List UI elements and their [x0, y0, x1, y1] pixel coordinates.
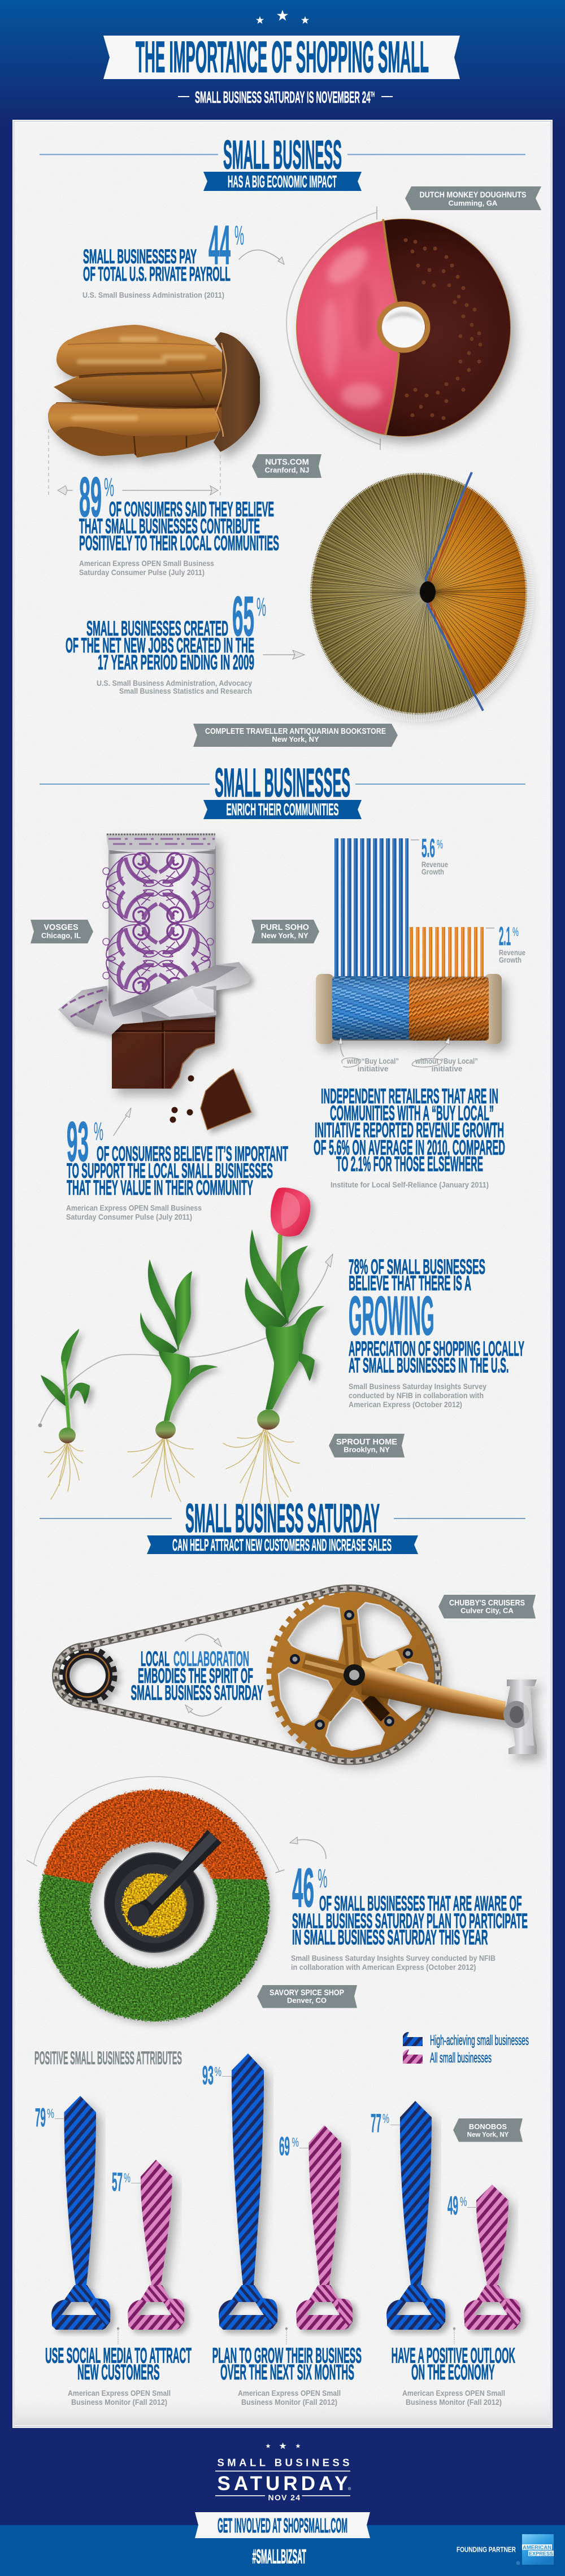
icon: american express logo: AMERICAN	[523, 2544, 551, 2551]
text: EMBODIES THE SPIRIT OF	[138, 1664, 253, 1687]
text: 89 percent	[79, 465, 279, 577]
ring window rims	[279, 1603, 428, 1750]
tag: nuts.com: NUTS.COM	[265, 458, 309, 467]
text: local collaboration	[131, 1634, 263, 1716]
text: OF THE NET NEW JOBS CREATED IN THE	[66, 634, 254, 657]
tag: bonobos	[453, 2118, 523, 2142]
text: 93 percent: Saturday Consumer Pulse (July 2011)	[66, 1213, 192, 1221]
tag: bonobos: BONOBOS	[469, 2122, 507, 2131]
illustration: fanned book pie chart	[310, 472, 537, 725]
label: 5.6 percent revenue growth: Growth	[421, 868, 444, 876]
tie bar: 79 percent	[51, 2096, 110, 2330]
illustration: chocolate bar	[58, 833, 251, 1130]
middle lobe	[54, 370, 222, 408]
label: 2.1 percent revenue growth: Growth	[499, 956, 521, 964]
caption: social media: USE SOCIAL MEDIA TO ATTRACT	[45, 2344, 192, 2368]
text: OF TOTAL U.S. PRIVATE PAYROLL	[83, 263, 231, 285]
text: 46 percent	[290, 1837, 528, 1972]
text: 65 percent: SMALL BUSINESSES CREATED	[86, 617, 228, 640]
text: growing appreciation: American Express (October 2012)	[349, 1400, 462, 1409]
chain	[56, 1588, 438, 1761]
arrow: to doughnut	[239, 250, 284, 264]
tag: sprout home	[329, 1434, 405, 1457]
tag: dutch monkey doughnuts	[405, 186, 541, 210]
back bottom lobe	[48, 402, 221, 458]
text: 46 percent: %	[318, 1863, 328, 1893]
text: 65 percent	[66, 585, 266, 695]
icon: stars	[256, 10, 309, 24]
tag: purl soho: PURL SOHO	[260, 923, 309, 932]
tag: vosges: VOSGES	[44, 923, 79, 932]
subtitle	[178, 89, 393, 107]
label: 5.6 percent revenue growth: 5.6	[421, 833, 435, 863]
tag: sprout home: SPROUT HOME	[336, 1438, 397, 1447]
text: growing appreciation	[349, 1255, 524, 1409]
tag: savory spice shop: Denver, CO	[287, 1996, 327, 2004]
tag: purl soho	[251, 920, 319, 943]
founding partner	[457, 2534, 554, 2565]
legend item: high-achieving	[403, 2032, 529, 2048]
front bottom lobe	[48, 403, 220, 436]
text: 44 percent payroll: SMALL BUSINESSES PAY	[83, 246, 197, 268]
value: 57 percent: %	[124, 2170, 131, 2185]
tag: complete traveller antiquarian bookstore: COMPLETE TRAVELLER ANTIQUARIAN BOOKSTORE	[205, 727, 386, 736]
caption: positive outlook	[392, 2344, 515, 2407]
text: growing appreciation: Small Business Saturday Insights Survey	[349, 1382, 486, 1391]
label: 2.1 percent revenue growth: %	[512, 925, 519, 939]
tag: chubby's cruisers	[438, 1595, 536, 1618]
footer logo: small business saturday: SATURDAY	[217, 2473, 348, 2495]
legend item: all small businesses	[403, 2050, 492, 2066]
text: TO SUPPORT THE LOCAL SMALL BUSINESSES	[67, 1159, 273, 1182]
illustration: tulips bar chart	[41, 1187, 324, 1505]
illustration: bicycle crank and chain	[56, 1588, 537, 1761]
value: 79 percent: %	[47, 2106, 54, 2121]
text: local collaboration: LOCAL	[141, 1647, 169, 1670]
label: 2.1 percent revenue growth: Revenue	[499, 948, 525, 957]
tie bar: 93 percent	[219, 2053, 277, 2330]
text: 93 percent: THAT THEY VALUE IN THEIR COMMUNITY	[67, 1176, 253, 1199]
text: %	[257, 592, 266, 621]
bar: 5.6 percent threads	[334, 838, 408, 978]
text: %	[234, 221, 244, 251]
chart: tie bar chart	[35, 2053, 520, 2330]
tie bar: 69 percent	[296, 2125, 353, 2330]
caption: social media: American Express OPEN Small	[68, 2389, 171, 2397]
sketch: growth arrow	[38, 1254, 333, 1427]
text: 93 percent	[66, 1110, 288, 1221]
tag: complete traveller antiquarian bookstore: New York, NY	[272, 735, 319, 743]
value: 69 percent: %	[292, 2135, 299, 2149]
text: 65 percent: U.S. Small Business Administration, Advocacy	[97, 679, 252, 687]
mortar	[105, 1830, 221, 1952]
label: buy local initiative: with “Buy Local”	[346, 1057, 399, 1065]
caption: grow business: Business Monitor (Fall 2012)	[241, 2398, 337, 2407]
caption: grow business: American Express OPEN Small	[238, 2389, 341, 2397]
text: growing appreciation: conducted by NFIB in collaboration with	[349, 1391, 484, 1400]
text: COLLABORATION	[173, 1647, 249, 1670]
heading: small business saturday	[40, 1496, 525, 1555]
label: 5.6 percent revenue growth: %	[437, 837, 443, 851]
text: 89 percent: American Express OPEN Small Business	[79, 559, 214, 568]
label: buy local initiative: without “Buy Local”	[415, 1057, 478, 1065]
crank arm	[362, 1660, 506, 1720]
torn foil	[58, 962, 250, 1035]
sketch: spice ring arc	[27, 1777, 284, 1873]
top lobe	[56, 325, 222, 377]
text: 65 percent: Small Business Statistics and Research	[119, 687, 252, 695]
tulip: small	[41, 1329, 90, 1499]
caption: grow business	[212, 2344, 362, 2407]
spider arms	[304, 1624, 385, 1717]
legend: All small businesses	[430, 2050, 492, 2066]
text: independent retailers	[314, 1085, 505, 1189]
label: 2.1 percent revenue growth: 2.1	[499, 921, 511, 951]
label: buy local initiative	[338, 1038, 478, 1073]
caption: social media: NEW CUSTOMERS	[77, 2361, 159, 2384]
tie bar: 57 percent	[128, 2160, 184, 2330]
heading: small business: HAS A BIG ECONOMIC IMPACT	[228, 173, 337, 191]
legend	[403, 2032, 529, 2066]
bar: 2.1 percent threads	[410, 927, 484, 979]
text: independent retailers: Institute for Local Self-Reliance (January 2011)	[331, 1181, 489, 1189]
founding partner: FOUNDING PARTNER	[457, 2546, 516, 2554]
tie bar: 49 percent	[464, 2185, 520, 2330]
text: 44 percent payroll	[82, 214, 244, 299]
tag: bonobos: New York, NY	[467, 2132, 509, 2139]
tulip: medium	[128, 1259, 218, 1502]
illustration: doughnut pie chart	[296, 219, 511, 437]
label: 5.6 percent revenue growth: Revenue	[421, 860, 448, 869]
footer logo: small business saturday: ®	[348, 2487, 351, 2491]
tag: chubby's cruisers: Culver City, CA	[460, 1607, 514, 1615]
header	[103, 10, 460, 107]
value: 93 percent: %	[215, 2064, 221, 2079]
icon: american express logo: EXPRESS	[529, 2551, 553, 2557]
text: 44 percent payroll: 44	[208, 214, 231, 276]
tag: savory spice shop	[257, 1985, 357, 2008]
ribbon: get involved	[195, 2512, 370, 2538]
text: 93 percent: American Express OPEN Small Business	[66, 1204, 202, 1212]
text: 46 percent: in collaboration with American Express (October 2012)	[291, 1963, 476, 1972]
sketch: pecan measure	[49, 429, 220, 496]
arrow: to book	[263, 650, 305, 659]
illustration: pecan	[48, 325, 260, 458]
footer logo: small business saturday: SMALL BUSINESS	[217, 2456, 349, 2469]
value: 49 percent: %	[460, 2194, 467, 2209]
subtitle: SMALL BUSINESS SATURDAY IS NOVEMBER 24	[195, 89, 565, 107]
value: 69 percent: 69	[279, 2131, 290, 2161]
shell	[214, 332, 260, 452]
caption: social media: Business Monitor (Fall 2012)	[71, 2398, 167, 2407]
text: 46 percent: 46	[292, 1857, 314, 1918]
text: 46 percent: Small Business Saturday Insights Survey conducted by NFIB	[291, 1954, 496, 1963]
value: 77 percent: %	[383, 2111, 389, 2126]
text: OF CONSUMERS BELIEVE IT’S IMPORTANT	[97, 1142, 288, 1165]
tulip: tall	[223, 1187, 324, 1505]
tag: nuts.com: Cranford, NJ	[265, 465, 309, 475]
value: 93 percent: 93	[202, 2061, 214, 2090]
label: buy local initiative: initiative	[358, 1064, 389, 1073]
tag: vosges: Chicago, IL	[41, 931, 81, 940]
value: 79 percent: 79	[35, 2103, 46, 2132]
text: PLAN TO GROW THEIR BUSINESS	[212, 2344, 362, 2368]
label: 5.6 percent revenue growth	[411, 833, 448, 876]
tag: nuts.com	[252, 454, 321, 478]
tag: savory spice shop: SAVORY SPICE SHOP	[270, 1988, 344, 1998]
text: 44 percent payroll: U.S. Small Business Administration (2011)	[82, 291, 224, 299]
tag: dutch monkey doughnuts: Cumming, GA	[449, 199, 498, 207]
group: grow business	[202, 2053, 353, 2330]
arrow: to chocolate	[114, 1108, 131, 1135]
text: OF CONSUMERS SAID THEY BELIEVE	[109, 498, 274, 521]
subtitle: TH	[371, 90, 375, 98]
value: 57 percent: 57	[112, 2167, 123, 2196]
illustration: spice ring pie chart	[39, 1790, 272, 2025]
text: 93 percent: %	[94, 1117, 103, 1146]
caption: social media	[45, 2327, 455, 2407]
value: 77 percent: 77	[371, 2108, 381, 2138]
label: 2.1 percent revenue growth	[486, 921, 525, 964]
sketch: doughnut arc	[286, 207, 380, 450]
caption: positive outlook: American Express OPEN Small	[402, 2389, 505, 2397]
footer logo: small business saturday: NOV 24	[268, 2493, 300, 2502]
pedal	[503, 1679, 537, 1754]
footer logo: small business saturday	[215, 2443, 351, 2502]
tag: complete traveller antiquarian bookstore	[193, 724, 398, 747]
text: 89 percent: Saturday Consumer Pulse (July 2011)	[79, 568, 205, 577]
small sprocket	[60, 1648, 115, 1703]
tag: chubby's cruisers: CHUBBY'S CRUISERS	[449, 1599, 525, 1608]
text: 89 percent: %	[104, 472, 114, 502]
group: positive outlook	[371, 2101, 520, 2330]
group: social media	[35, 2096, 184, 2330]
text: 93 percent: 93	[67, 1110, 89, 1173]
heading: small businesses	[40, 761, 525, 819]
chocolate	[112, 1017, 215, 1089]
heading: small businesses: ENRICH THEIR COMMUNITIES	[226, 800, 339, 819]
broken piece	[201, 1069, 251, 1130]
crank hub and bolts	[290, 1610, 413, 1730]
text: SMALL BUSINESS SATURDAY	[131, 1681, 263, 1704]
foil wrapper	[106, 833, 216, 1021]
text: 89 percent: 89	[79, 465, 102, 528]
tie bar: 77 percent	[386, 2101, 445, 2330]
tag: sprout home: Brooklyn, NY	[344, 1445, 390, 1454]
heading: small business	[40, 133, 525, 191]
text: THAT SMALL BUSINESSES CONTRIBUTE	[79, 515, 260, 538]
tag: vosges	[31, 920, 93, 943]
illustration: thread spool bar chart	[316, 838, 502, 1044]
big chainring	[269, 1590, 440, 1760]
tag: dutch monkey doughnuts: DUTCH MONKEY DOUGHNUTS	[419, 191, 527, 200]
text: POSITIVELY TO THEIR LOCAL COMMUNITIES	[79, 532, 279, 555]
value: 49 percent: 49	[447, 2191, 458, 2220]
text: 17 YEAR PERIOD ENDING IN 2009	[98, 651, 254, 674]
text: POSITIVE SMALL BUSINESS ATTRIBUTES	[34, 2048, 182, 2068]
text: 65 percent: 65	[232, 585, 254, 647]
icon: american express logo	[522, 2534, 554, 2565]
text: OVER THE NEXT SIX MONTHS	[220, 2361, 354, 2384]
text: #SMALLBIZSAT	[252, 2545, 306, 2568]
tag: purl soho: New York, NY	[261, 931, 308, 940]
caption: positive outlook: Business Monitor (Fall 2012)	[406, 2398, 502, 2407]
label: buy local initiative: initiative	[432, 1064, 463, 1073]
